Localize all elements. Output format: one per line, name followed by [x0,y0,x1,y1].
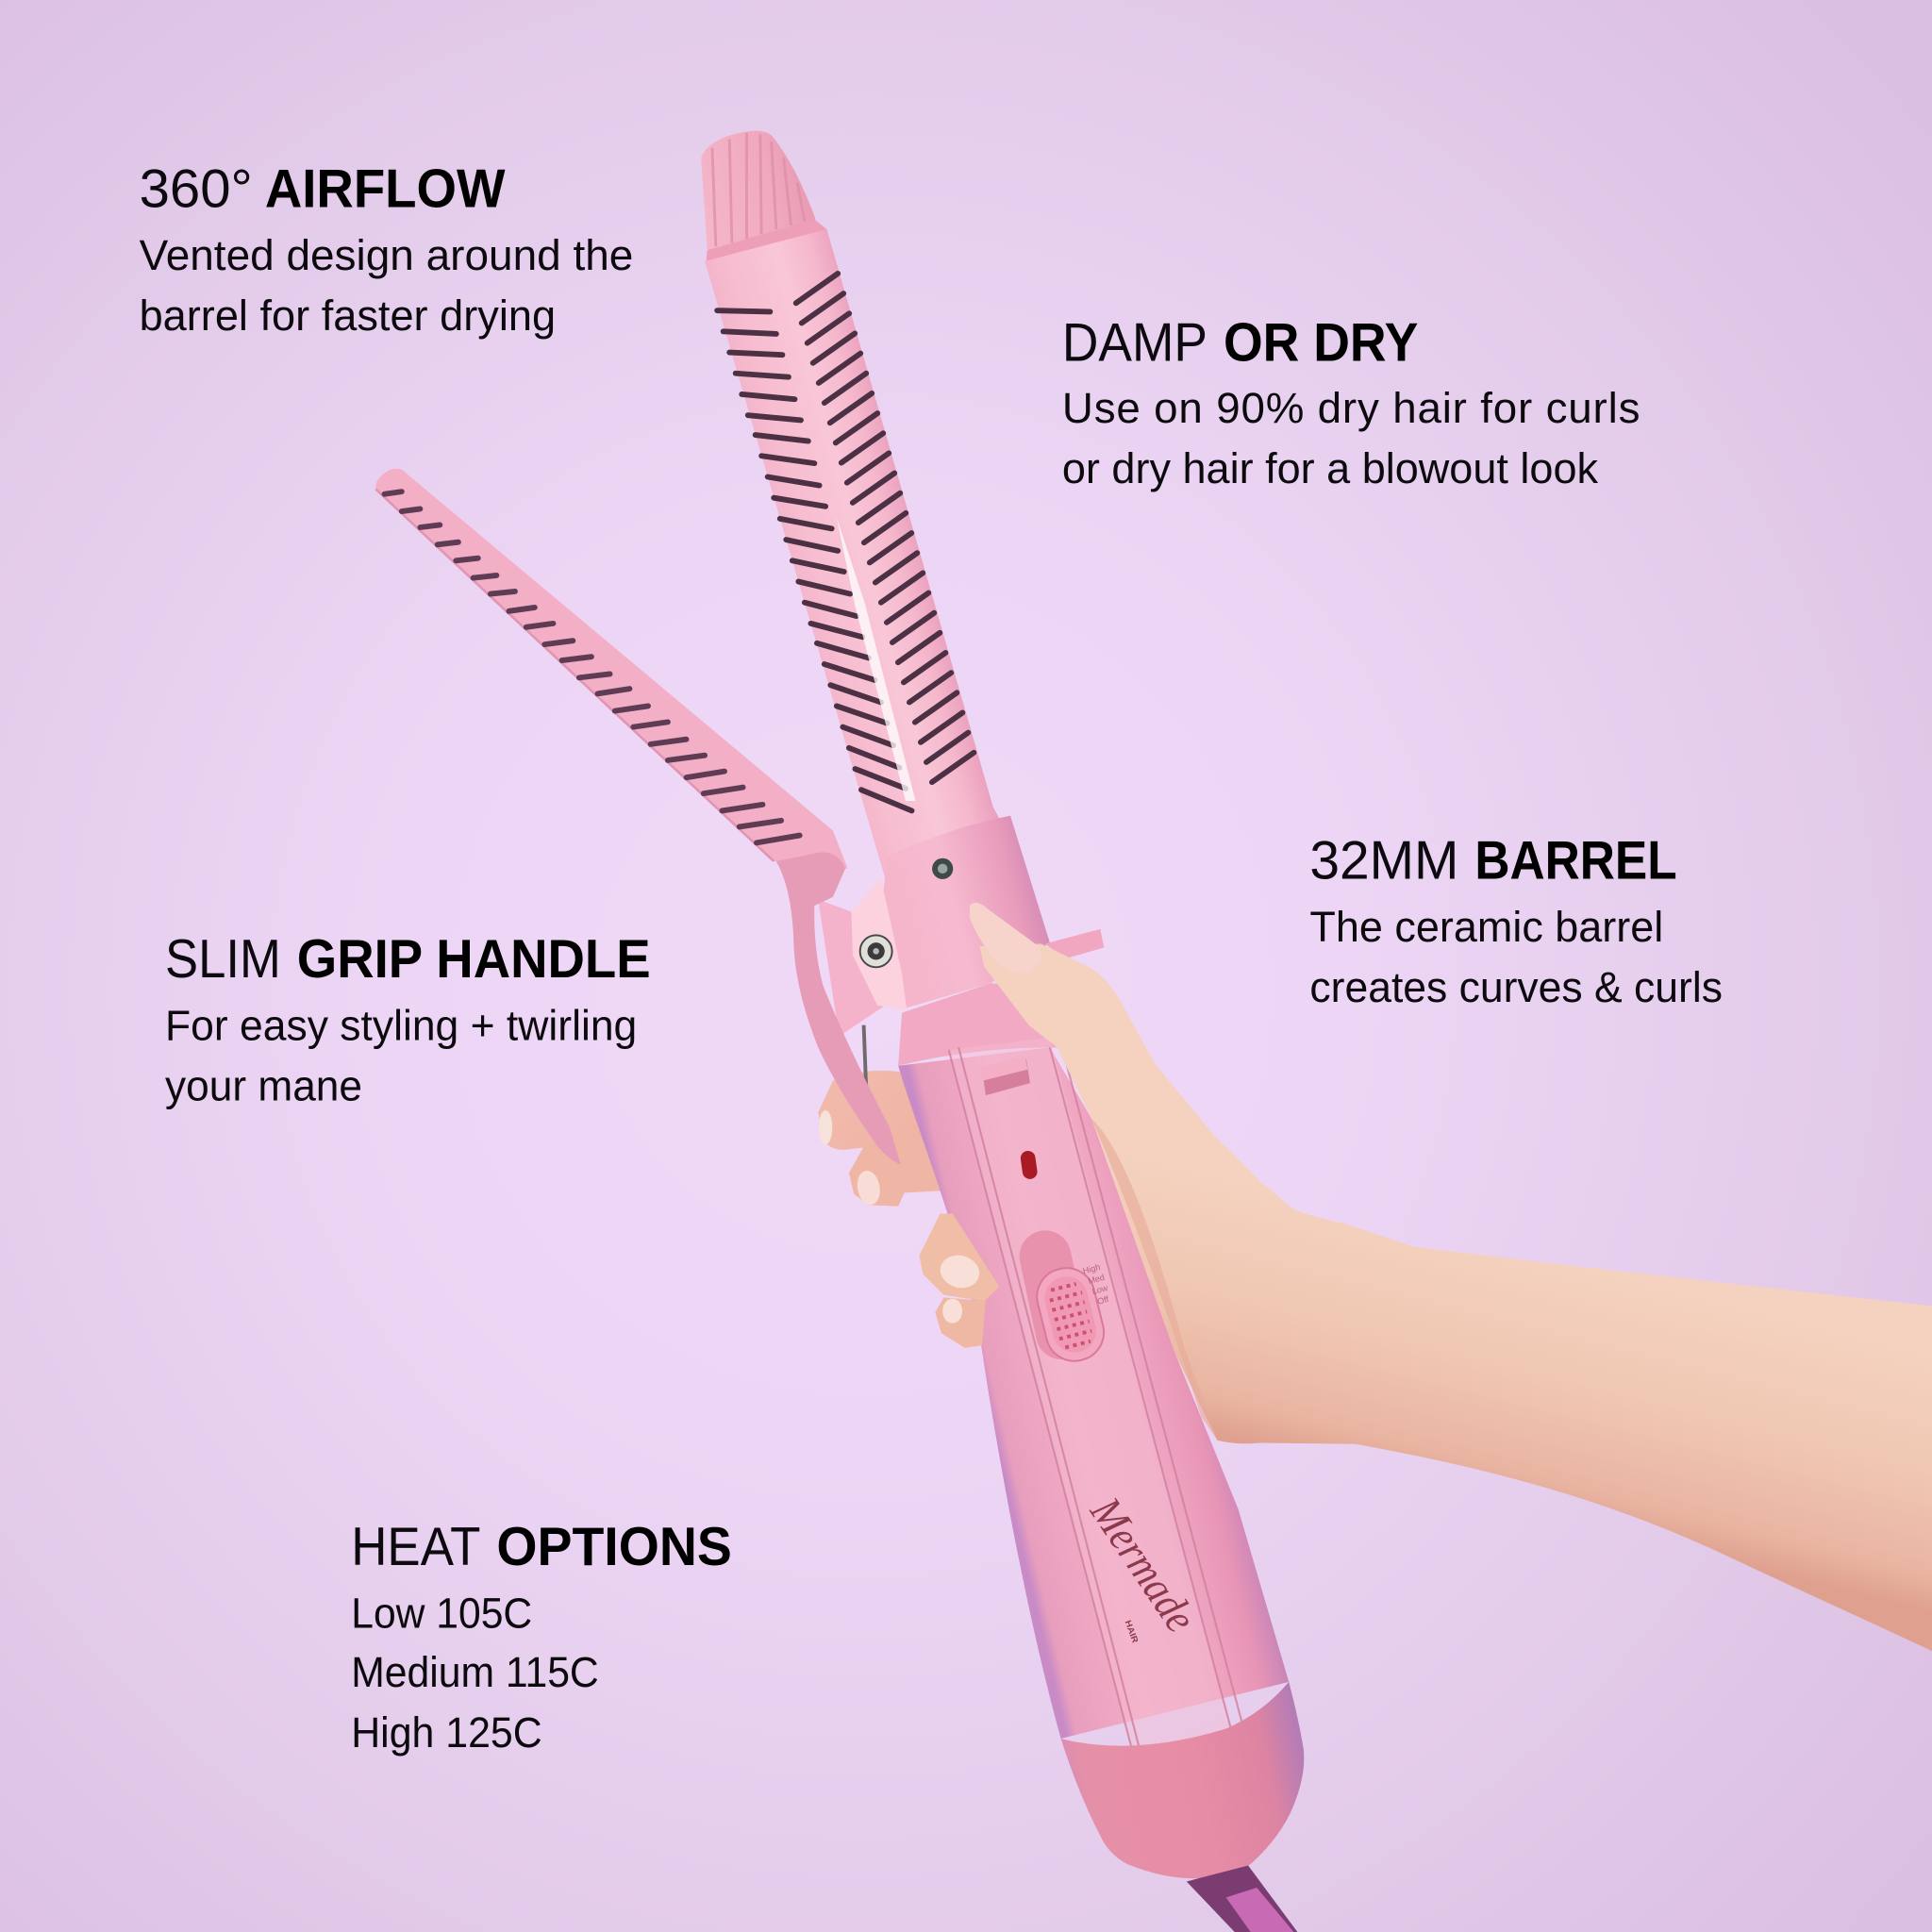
brand logo: Mermade [1080,1489,1206,1641]
callout: 32mm barrel: creates curves & curls [1309,963,1723,1011]
barrel tip cap [701,131,826,264]
power cord [1187,1865,1297,1932]
callout: damp or dry: OR DRY [1224,313,1418,374]
heat switch [1031,1262,1109,1367]
callout: slim grip handle: GRIP HANDLE [297,929,651,990]
callout: heat options: High 125C [351,1708,542,1757]
screw pivot [860,935,892,967]
barrel highlight [837,518,915,801]
slider slot [982,1059,1030,1095]
neck ring [898,983,1058,1066]
LED indicator [1020,1150,1039,1180]
fingernail [937,1251,983,1292]
callout: 360 airflow: AIRFLOW [265,158,506,219]
callout: slim grip handle: SLIM [165,929,281,990]
callout: heat options: Medium 115C [351,1648,599,1696]
back fingers [818,1071,951,1207]
heat level labels [1082,1261,1112,1307]
fingernail [855,1169,883,1207]
heat level labels: High [1082,1262,1101,1275]
callout: 32mm barrel: 32MM [1309,830,1458,891]
fingernail [819,1110,832,1144]
hand and forearm [970,903,1932,1651]
callout: slim grip handle: For easy styling + twirling [165,1001,637,1049]
callout: 360 airflow [140,158,633,340]
callout: damp or dry: DAMP [1062,313,1208,374]
callout: heat options [351,1517,732,1757]
brand logo: HAIR [1124,1619,1141,1644]
callout: 32mm barrel: The ceramic barrel [1309,903,1663,951]
pale bracket [852,878,907,1010]
fingernail [942,1299,962,1324]
callout: 360 airflow: Vented design around the [140,231,633,279]
callout: slim grip handle: your mane [165,1061,362,1109]
callout: slim grip handle [165,929,651,1109]
callout: 32mm barrel: BARREL [1474,830,1677,891]
callout: 360 airflow: barrel for faster drying [140,291,556,340]
finger: upper [818,1071,937,1150]
clamp slots [385,491,800,842]
handle [898,983,1304,1932]
vent slots right row [796,274,974,782]
callout: heat options: Low 105C [351,1589,532,1637]
finger: second [849,1140,951,1207]
callout: damp or dry [1062,313,1640,492]
heat level labels: Low [1091,1283,1109,1296]
finger: little [935,1297,986,1348]
thumb nail [970,903,1041,973]
panel lines [949,1047,1242,1751]
finger: third [919,1214,999,1301]
collar tab [1045,929,1104,958]
clamp lever and spring [776,853,901,1164]
heat level labels: Off [1096,1294,1110,1307]
callout: 360 airflow: 360° [140,158,253,219]
curling wand clamp arm [375,469,848,869]
centre panel [949,1038,1231,1751]
callout: heat options: HEAT [351,1517,480,1577]
callout: damp or dry: Use on 90% dry hair for curls [1062,384,1640,432]
front fingers [919,1214,999,1348]
barrel collar with bracket [852,816,1104,1010]
vented barrel [705,229,1023,881]
palm shadow [1091,1119,1217,1441]
callout: heat options: OPTIONS [496,1517,732,1577]
heat level labels: Med [1087,1273,1106,1286]
bottom end cap [1061,1682,1304,1878]
screw top [932,858,953,879]
callout: damp or dry: or dry hair for a blowout look [1062,444,1598,492]
callout: 32mm barrel [1309,830,1723,1011]
vent slots left row [717,310,912,810]
switch slot [1015,1225,1092,1364]
